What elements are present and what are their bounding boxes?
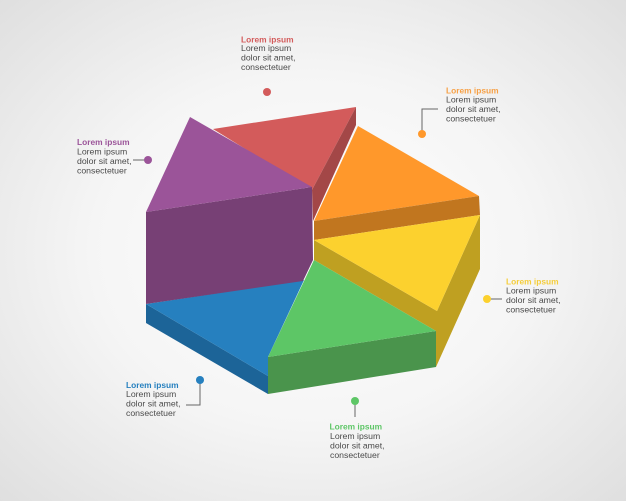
text block: green description: Lorem ipsum xyxy=(330,431,380,441)
text block: purple description: Lorem ipsum xyxy=(77,146,127,156)
text block: red description: Lorem ipsum xyxy=(241,43,291,53)
text block: red description: consectetuer xyxy=(241,62,291,72)
heading: purple label: Lorem ipsum xyxy=(77,137,130,147)
text block: green description: consectetuer xyxy=(330,450,380,460)
segment: red xyxy=(213,107,356,221)
marker: green dot xyxy=(351,397,359,405)
callout: red xyxy=(241,34,296,96)
segment: green xyxy=(268,260,436,394)
text block: orange description: dolor sit amet, xyxy=(446,104,501,114)
text block: red description: dolor sit amet, xyxy=(241,53,296,63)
callout: orange xyxy=(418,86,501,138)
heading: green label: Lorem ipsum xyxy=(330,422,382,432)
segment: orange xyxy=(314,126,480,240)
chart: 3D segmented hexagon xyxy=(146,107,480,394)
heading: red label: Lorem ipsum xyxy=(241,34,294,44)
text block: yellow description: consectetuer xyxy=(506,305,556,315)
text block: purple description: dolor sit amet, xyxy=(77,156,132,166)
callout: green xyxy=(330,397,385,460)
text block: green description: dolor sit amet, xyxy=(330,441,385,451)
text block: orange description: Lorem ipsum xyxy=(446,94,496,104)
text block: blue description: dolor sit amet, xyxy=(126,399,181,409)
callout: blue xyxy=(126,376,204,418)
heading: orange label: Lorem ipsum xyxy=(446,86,499,96)
text block: blue description: Lorem ipsum xyxy=(126,389,176,399)
segment: blue xyxy=(146,280,304,394)
text block: yellow description: Lorem ipsum xyxy=(506,286,556,296)
callout: purple xyxy=(77,137,152,176)
marker: blue dot xyxy=(196,376,204,384)
text block: purple description: consectetuer xyxy=(77,166,127,176)
callout: yellow xyxy=(483,276,561,315)
text block: yellow description: dolor sit amet, xyxy=(506,295,561,305)
text block: orange description: consectetuer xyxy=(446,114,496,124)
heading: yellow label: Lorem ipsum xyxy=(506,276,559,286)
marker: red dot xyxy=(263,88,271,96)
heading: blue label: Lorem ipsum xyxy=(126,380,179,390)
marker: yellow dot xyxy=(483,295,491,303)
text block: blue description: consectetuer xyxy=(126,408,176,418)
marker: purple dot xyxy=(144,156,152,164)
segment: yellow xyxy=(314,215,480,367)
segment: purple xyxy=(146,117,313,304)
marker: orange dot xyxy=(418,130,426,138)
